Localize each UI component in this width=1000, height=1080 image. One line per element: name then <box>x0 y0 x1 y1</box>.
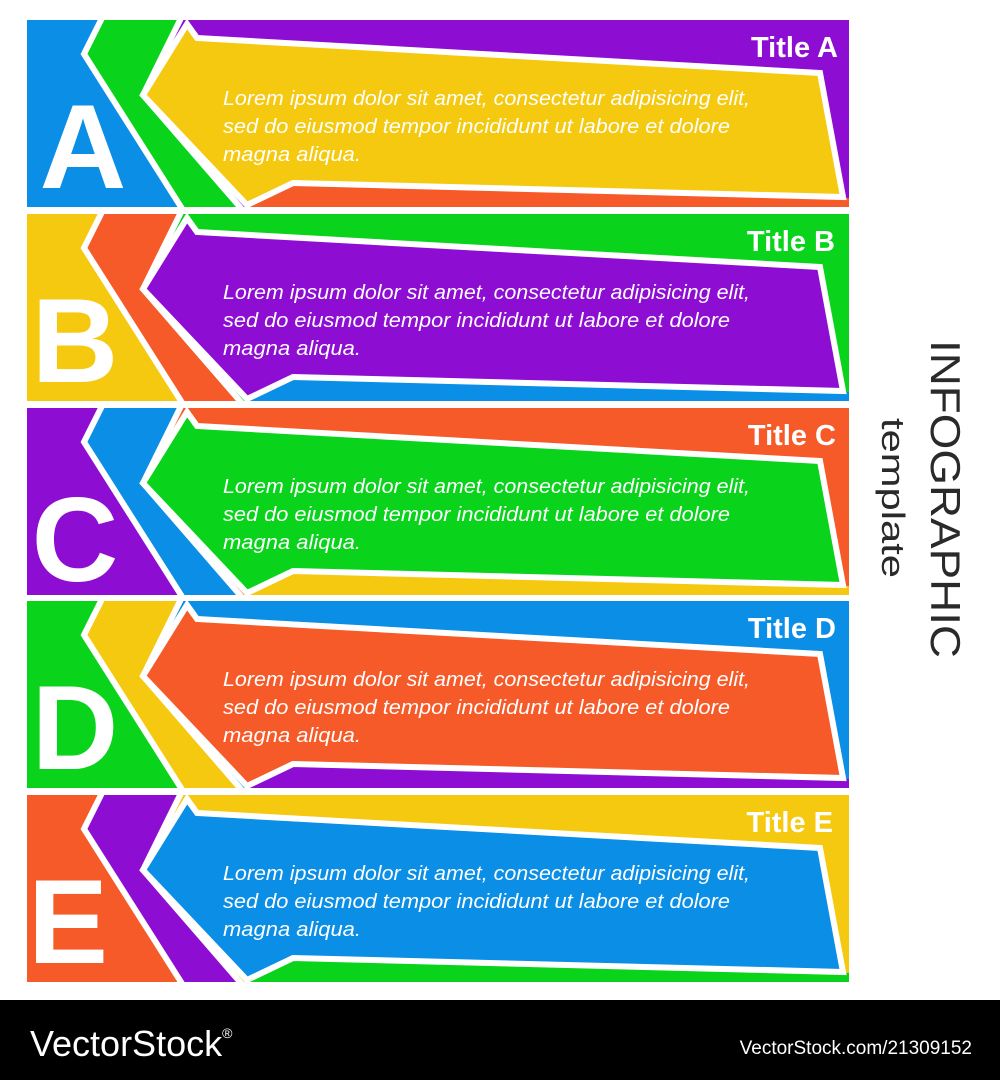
text D: magna aliqua. <box>223 725 361 747</box>
title A: Title A <box>751 32 838 64</box>
title D: Title D <box>748 613 836 645</box>
row A <box>27 20 849 207</box>
text E: magna aliqua. <box>223 919 361 941</box>
letter E: E <box>28 855 108 989</box>
row B <box>27 214 849 401</box>
vertical heading <box>875 340 969 658</box>
footer bar <box>0 1000 1000 1080</box>
title B: Title B <box>747 226 835 258</box>
text B: sed do eiusmod tempor incididunt ut labore et dolore <box>223 310 730 332</box>
letter A: A <box>40 80 126 214</box>
text D: Lorem ipsum dolor sit amet, consectetur adipisicing elit, <box>223 669 750 691</box>
text C: Lorem ipsum dolor sit amet, consectetur adipisicing elit, <box>223 476 750 498</box>
title E: Title E <box>746 807 833 839</box>
text D <box>223 669 750 747</box>
vertical heading: INFOGRAPHIC <box>922 340 969 658</box>
text B: magna aliqua. <box>223 338 361 360</box>
footer bar: ® <box>222 1025 233 1041</box>
letter D: D <box>32 661 118 795</box>
vertical heading: template <box>875 418 911 578</box>
text E: Lorem ipsum dolor sit amet, consectetur adipisicing elit, <box>223 863 750 885</box>
text D: sed do eiusmod tempor incididunt ut labore et dolore <box>223 697 730 719</box>
text A: sed do eiusmod tempor incididunt ut labore et dolore <box>223 116 730 138</box>
text B <box>223 282 750 360</box>
text A: Lorem ipsum dolor sit amet, consectetur adipisicing elit, <box>223 88 750 110</box>
text E: sed do eiusmod tempor incididunt ut labore et dolore <box>223 891 730 913</box>
letter C: C <box>32 473 118 607</box>
text E <box>223 863 750 941</box>
row E <box>27 795 849 982</box>
text C: sed do eiusmod tempor incididunt ut labore et dolore <box>223 504 730 526</box>
letter B: B <box>32 274 118 408</box>
text A <box>223 88 750 166</box>
title C: Title C <box>748 420 836 452</box>
footer bar: VectorStock <box>30 1023 222 1064</box>
text B: Lorem ipsum dolor sit amet, consectetur adipisicing elit, <box>223 282 750 304</box>
text C: magna aliqua. <box>223 532 361 554</box>
footer bar: VectorStock.com/21309152 <box>740 1038 972 1059</box>
row D <box>27 601 849 788</box>
text C <box>223 476 750 554</box>
text A: magna aliqua. <box>223 144 361 166</box>
row C <box>27 408 849 595</box>
